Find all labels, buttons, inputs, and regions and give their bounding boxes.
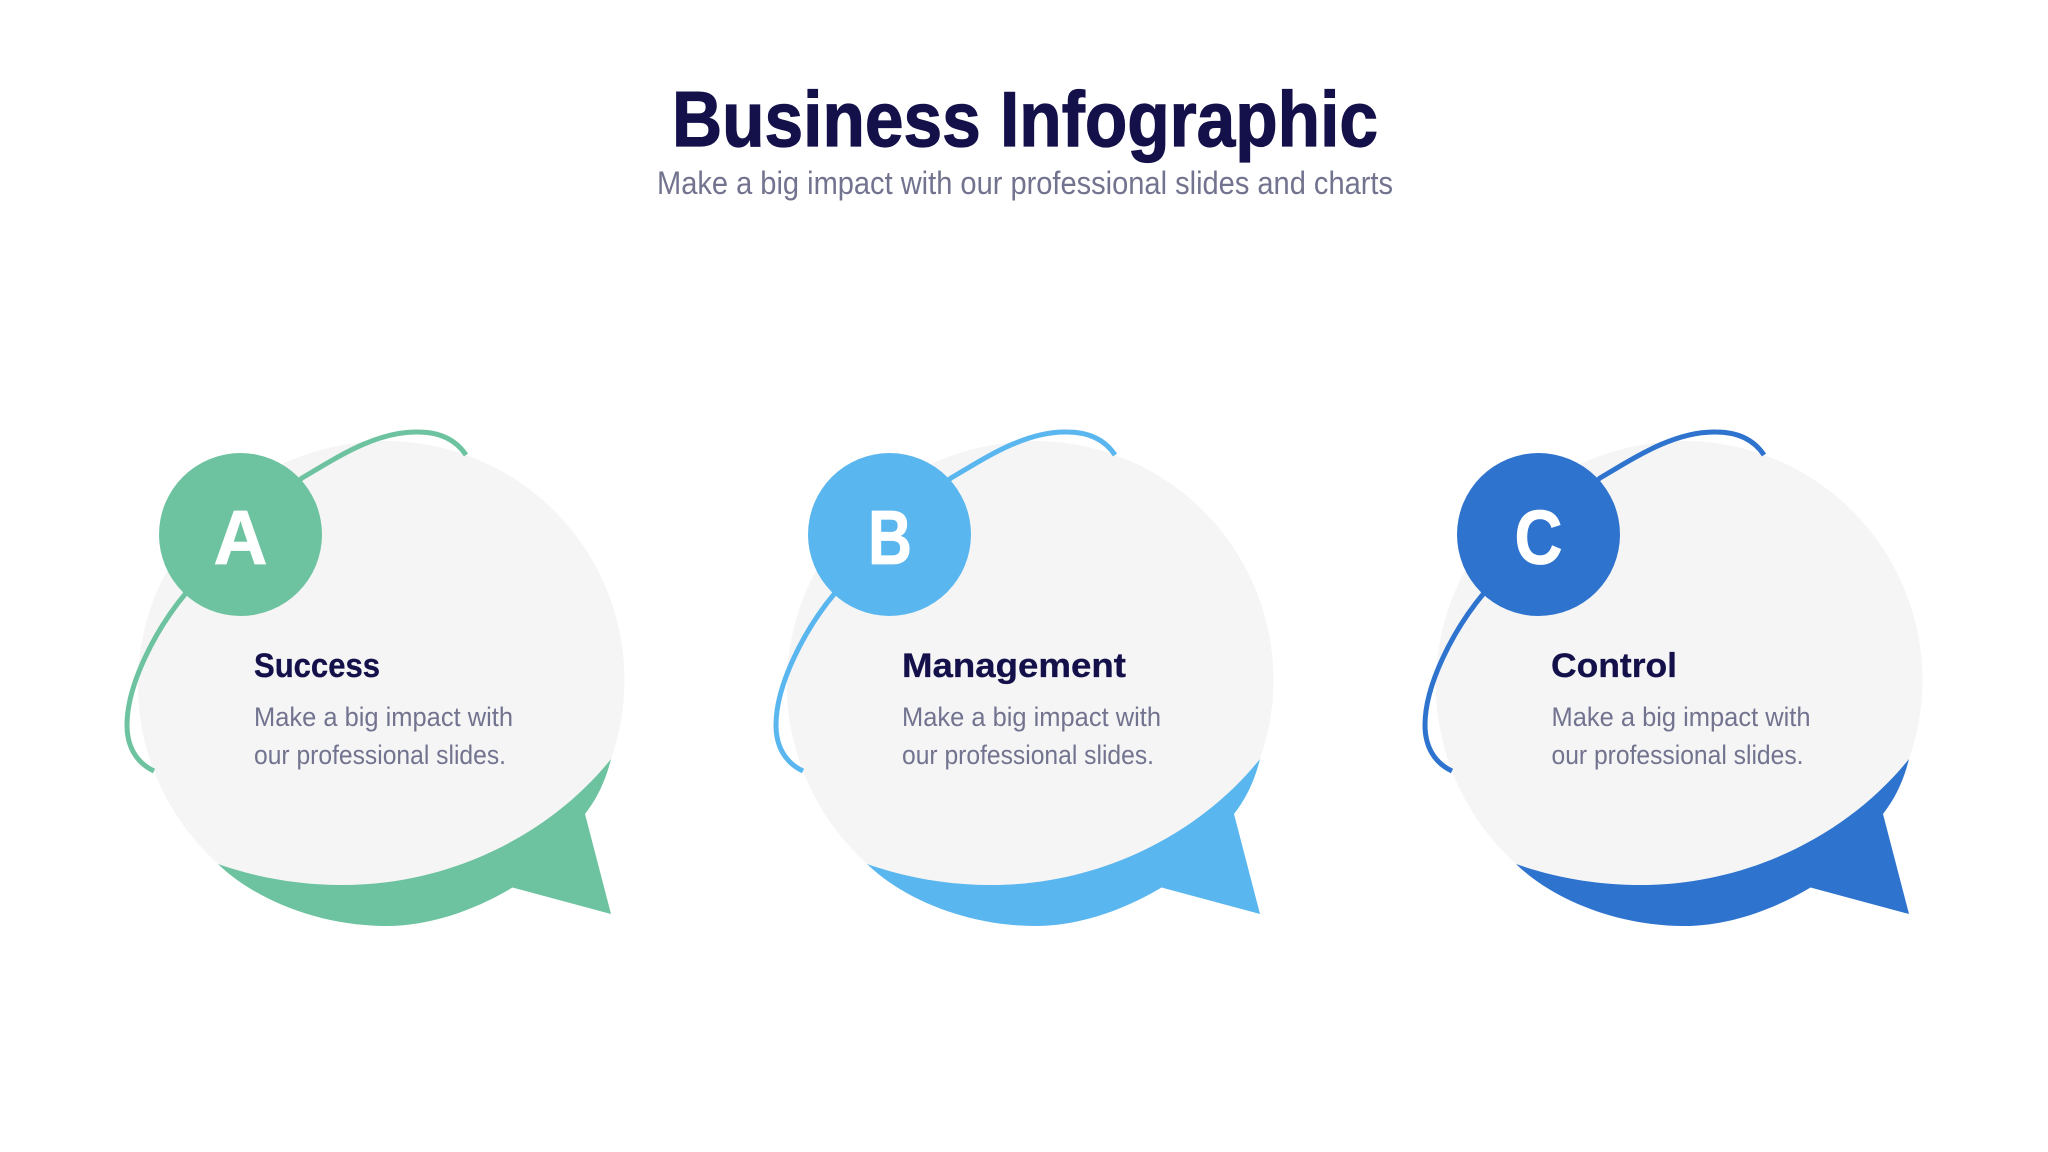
letter badge: B: [808, 453, 971, 616]
panel: card C Control: [1425, 432, 1922, 926]
title: Business Infographic: [672, 75, 1378, 163]
speech bubble tail: B: [867, 759, 1260, 926]
bubble body: B: [787, 441, 1273, 885]
heading: Control: Control: [1551, 647, 1677, 685]
heading: Management: Management: [902, 647, 1126, 685]
panel: card B Management: [776, 432, 1273, 926]
speech bubble tail: A: [218, 759, 611, 926]
bubble body: C: [1436, 441, 1922, 885]
bubble body: A: [138, 441, 624, 885]
orbit arc: B: [776, 432, 1115, 771]
description: C: our professional slides.: [1552, 740, 1804, 770]
description: B: Make a big impact with: [902, 702, 1161, 732]
description: A: Make a big impact with: [254, 702, 513, 732]
orbit arc: A: [127, 432, 466, 771]
letter badge: B: B: [868, 495, 912, 581]
panel: card A Success: [127, 432, 624, 926]
speech bubble tail: C: [1516, 759, 1909, 926]
description: A: our professional slides.: [254, 740, 506, 770]
letter badge: C: [1457, 453, 1620, 616]
letter badge: A: [159, 453, 322, 616]
letter badge: A: A: [214, 495, 268, 581]
subtitle: Make a big impact with our professional slides and charts: [657, 165, 1393, 201]
heading: Success: Success: [254, 647, 380, 685]
description: B: our professional slides.: [902, 740, 1154, 770]
orbit arc: C: [1425, 432, 1764, 771]
description: C: Make a big impact with: [1552, 702, 1810, 732]
letter badge: C: C: [1514, 495, 1562, 581]
